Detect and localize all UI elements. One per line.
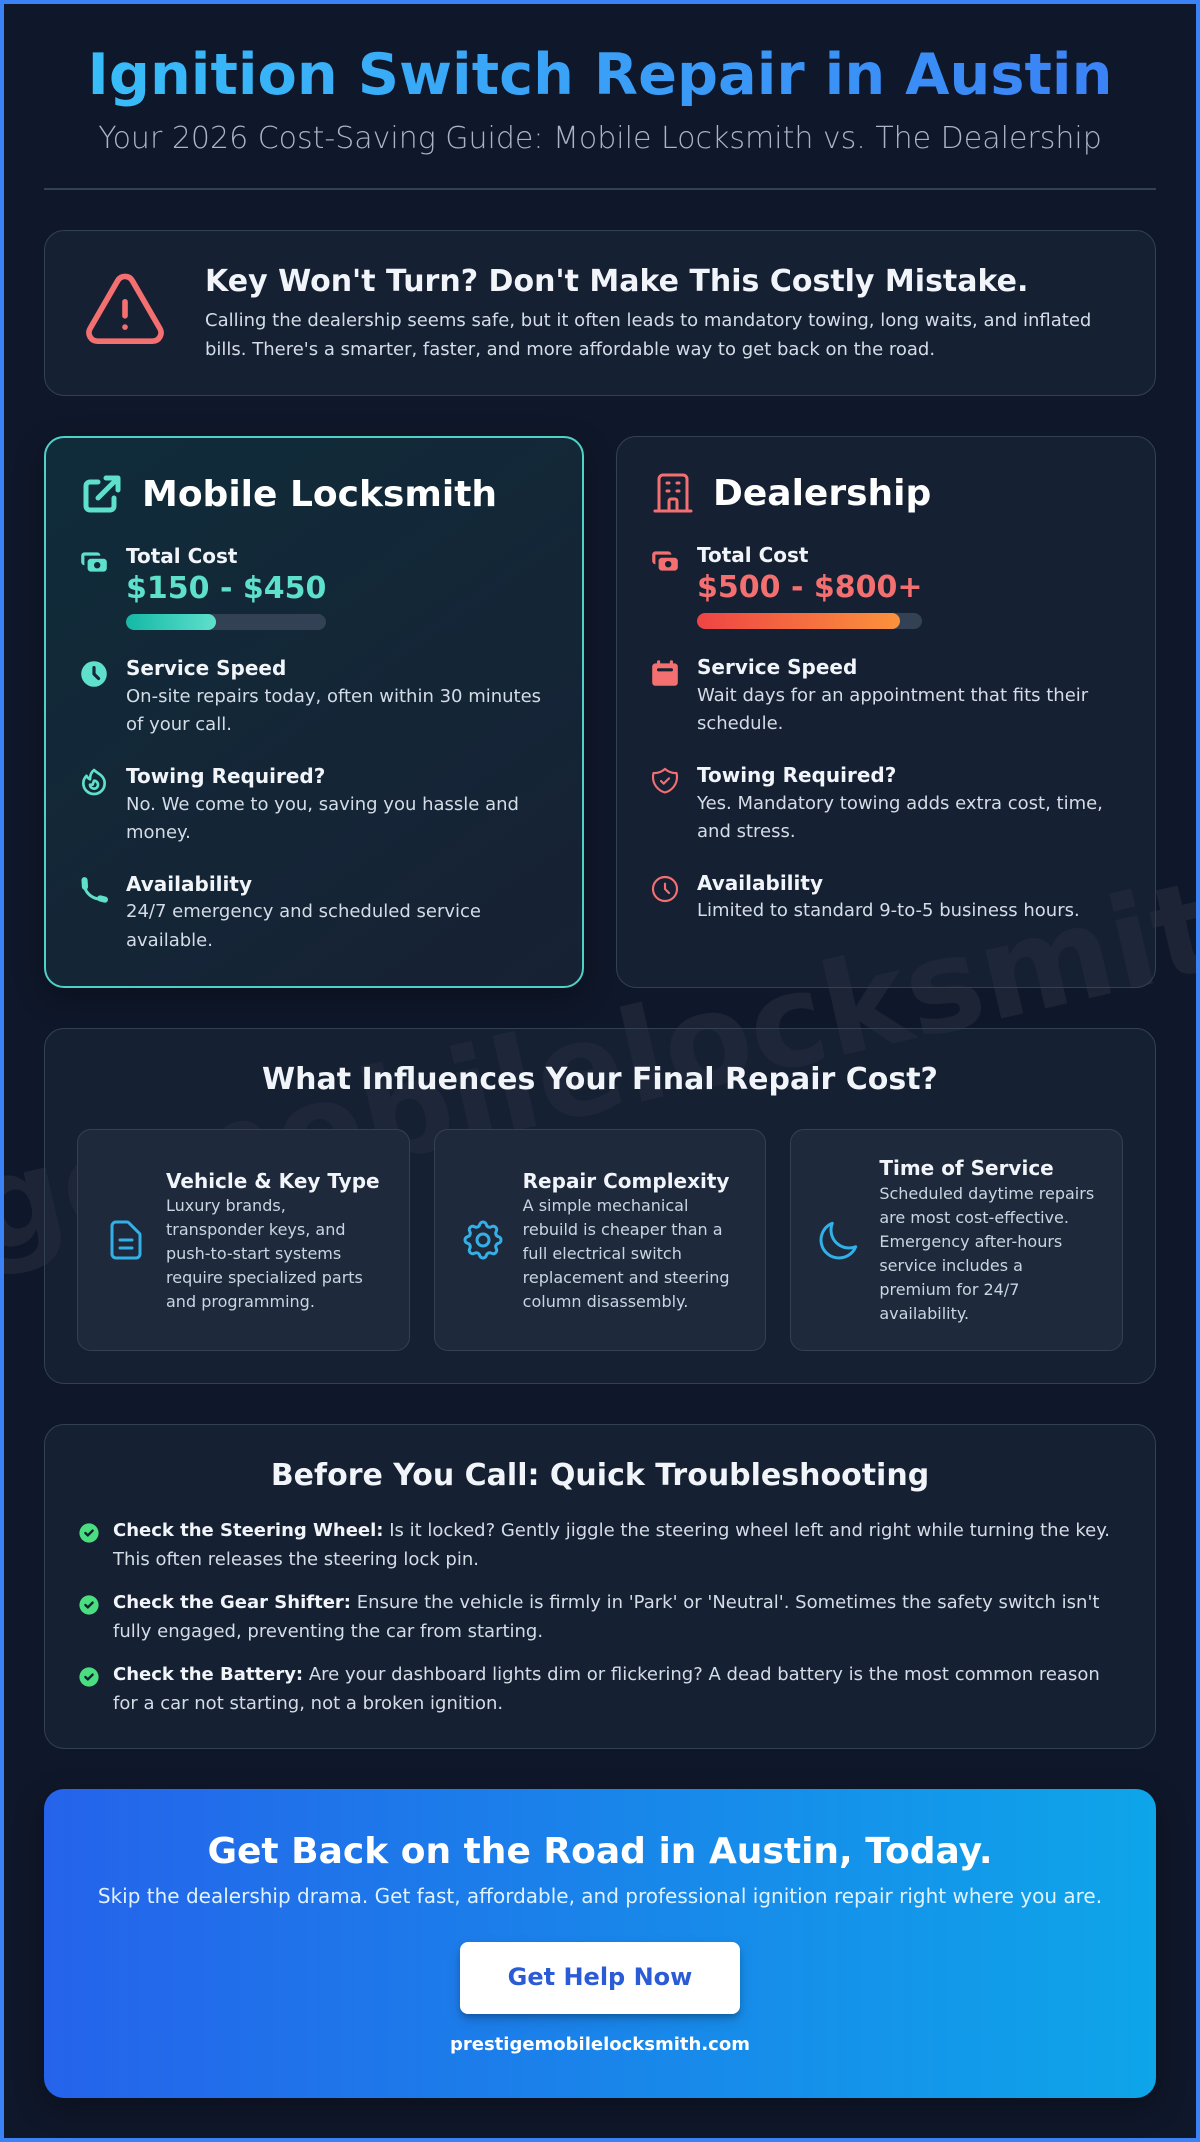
text: towing: Yes. Mandatory towing adds extra cost, time,	[697, 793, 1103, 814]
factor text: push-to-start systems	[166, 1244, 341, 1263]
text: service speed: Wait days for an appointment that fits their	[697, 685, 1088, 706]
icon: calendar	[652, 660, 678, 686]
icon: clock	[81, 661, 107, 687]
label: service speed: Service Speed	[126, 656, 286, 680]
icon: document	[110, 1220, 142, 1260]
subtitle: Your 2026 Cost-Saving Guide: Mobile Locksmith vs. The Dealership	[98, 121, 1102, 156]
button: Get Help Now	[508, 1963, 692, 1991]
label: total cost: Total Cost	[697, 543, 808, 567]
text: service speed: of your call.	[126, 714, 232, 735]
factor text: Scheduled daytime repairs	[879, 1184, 1094, 1203]
label: towing: Towing Required?	[697, 763, 896, 787]
text: service speed: On-site repairs today, often within 30 minutes	[126, 686, 541, 707]
text: towing: and stress.	[697, 821, 796, 842]
alert text: bills. There's a smarter, faster, and more affordable way to get back on the road.	[205, 339, 935, 360]
text: towing: No. We come to you, saving you hassle and	[126, 794, 519, 815]
website url: prestigemobilelocksmith.com	[450, 2034, 750, 2055]
cost value: $150 - $450	[126, 571, 326, 606]
alert text	[205, 310, 1091, 360]
factor text: transponder keys, and	[166, 1220, 346, 1239]
text: service speed	[126, 686, 541, 735]
icon: clock outline	[652, 876, 678, 902]
heading: Mobile Locksmith	[142, 474, 497, 515]
icon: check	[79, 1523, 99, 1543]
text: availability: available.	[126, 930, 213, 951]
panel: troubleshooting	[44, 1424, 1156, 1749]
text: availability	[126, 901, 481, 951]
text: service speed: schedule.	[697, 713, 783, 734]
label: availability: Availability	[126, 872, 252, 896]
factor: repair complexity	[434, 1129, 766, 1351]
tip: battery: for a car not starting, not a broken ignition.	[113, 1693, 503, 1714]
label: towing: Towing Required?	[126, 764, 325, 788]
tip: battery	[113, 1664, 1100, 1714]
cost bar	[697, 613, 922, 629]
label: total cost: Total Cost	[126, 544, 237, 568]
cost bar	[126, 614, 326, 630]
icon: phone	[81, 877, 108, 903]
factor text: column disassembly.	[523, 1292, 688, 1311]
text: towing	[697, 793, 1103, 842]
tip: steering wheel: Check the Steering Wheel: Is it locked? Gently jiggle the steering wheel left and right while turning the key.	[113, 1520, 1110, 1541]
tip: steering wheel	[112, 1520, 1110, 1570]
icon: external link	[84, 476, 120, 512]
factor text	[522, 1196, 730, 1311]
panel: alert	[44, 230, 1156, 396]
icon: office building	[654, 474, 692, 512]
icon: fire	[82, 768, 106, 796]
factor text: service includes a	[879, 1256, 1023, 1275]
icon: check	[79, 1667, 99, 1687]
cost value: $500 - $800+	[697, 570, 922, 605]
factor text: availability.	[879, 1304, 969, 1323]
factor text: A simple mechanical	[523, 1196, 688, 1215]
section heading: Before You Call: Quick Troubleshooting	[271, 1458, 929, 1493]
alert text: Calling the dealership seems safe, but it often leads to mandatory towing, long waits, and inflated	[205, 310, 1091, 331]
factor text	[879, 1184, 1094, 1323]
icon: check	[79, 1595, 99, 1615]
section heading: What Influences Your Final Repair Cost?	[262, 1062, 938, 1097]
factor text: Luxury brands,	[166, 1196, 286, 1215]
tip: gear shifter: Check the Gear Shifter: Ensure the vehicle is firmly in 'Park' or 'Neutral'. Sometimes the safety switch isn't	[113, 1592, 1099, 1613]
factor text: full electrical switch	[523, 1244, 682, 1263]
factor text: and programming.	[166, 1292, 315, 1311]
alert heading: Key Won't Turn? Don't Make This Costly Mistake.	[205, 264, 1028, 299]
factor text: require specialized parts	[166, 1268, 363, 1287]
panel: cost factors	[44, 1028, 1156, 1384]
factor text	[166, 1196, 363, 1311]
text: availability: Limited to standard 9-to-5 business hours.	[697, 900, 1080, 921]
panel: dealership	[616, 436, 1156, 988]
factor heading: Vehicle & Key Type	[166, 1169, 380, 1193]
factor text: premium for 24/7	[879, 1280, 1019, 1299]
text: towing	[126, 794, 519, 843]
label: service speed: Service Speed	[697, 655, 857, 679]
icon: shield check	[652, 768, 678, 794]
cta text: Skip the dealership drama. Get fast, affordable, and professional ignition repair right where you are.	[98, 1884, 1102, 1908]
factor text: rebuild is cheaper than a	[523, 1220, 723, 1239]
factor text: are most cost-effective.	[879, 1208, 1069, 1227]
text: service speed	[697, 685, 1088, 734]
icon: gear	[464, 1220, 502, 1260]
text: towing: money.	[126, 822, 191, 843]
panel: mobile locksmith	[44, 436, 584, 988]
factor text: replacement and steering	[523, 1268, 730, 1287]
factor heading: Time of Service	[879, 1156, 1054, 1180]
tip: gear shifter: fully engaged, preventing the car from starting.	[113, 1621, 543, 1642]
factor: vehicle and key type	[77, 1129, 410, 1351]
label: availability: Availability	[697, 871, 823, 895]
header divider	[44, 188, 1156, 190]
icon: moon	[820, 1222, 858, 1260]
factor text: Emergency after-hours	[879, 1232, 1062, 1251]
factor heading: Repair Complexity	[523, 1168, 729, 1192]
title: Ignition Switch Repair in Austin	[88, 41, 1112, 108]
heading: Dealership	[713, 473, 931, 514]
text: availability: 24/7 emergency and scheduled service	[126, 901, 481, 922]
icon: cash	[81, 552, 107, 572]
cta heading: Get Back on the Road in Austin, Today.	[207, 1831, 993, 1872]
tip: battery: Check the Battery: Are your dashboard lights dim or flickering? A dead battery is the most common reason	[113, 1664, 1100, 1685]
panel: call to action	[44, 1789, 1156, 2098]
icon: cash	[652, 551, 678, 571]
icon: warning triangle	[86, 274, 164, 344]
button	[460, 1942, 740, 2014]
tip: steering wheel: This often releases the steering lock pin.	[113, 1549, 479, 1570]
tip: gear shifter	[113, 1592, 1099, 1642]
factor: time of service	[790, 1129, 1123, 1351]
